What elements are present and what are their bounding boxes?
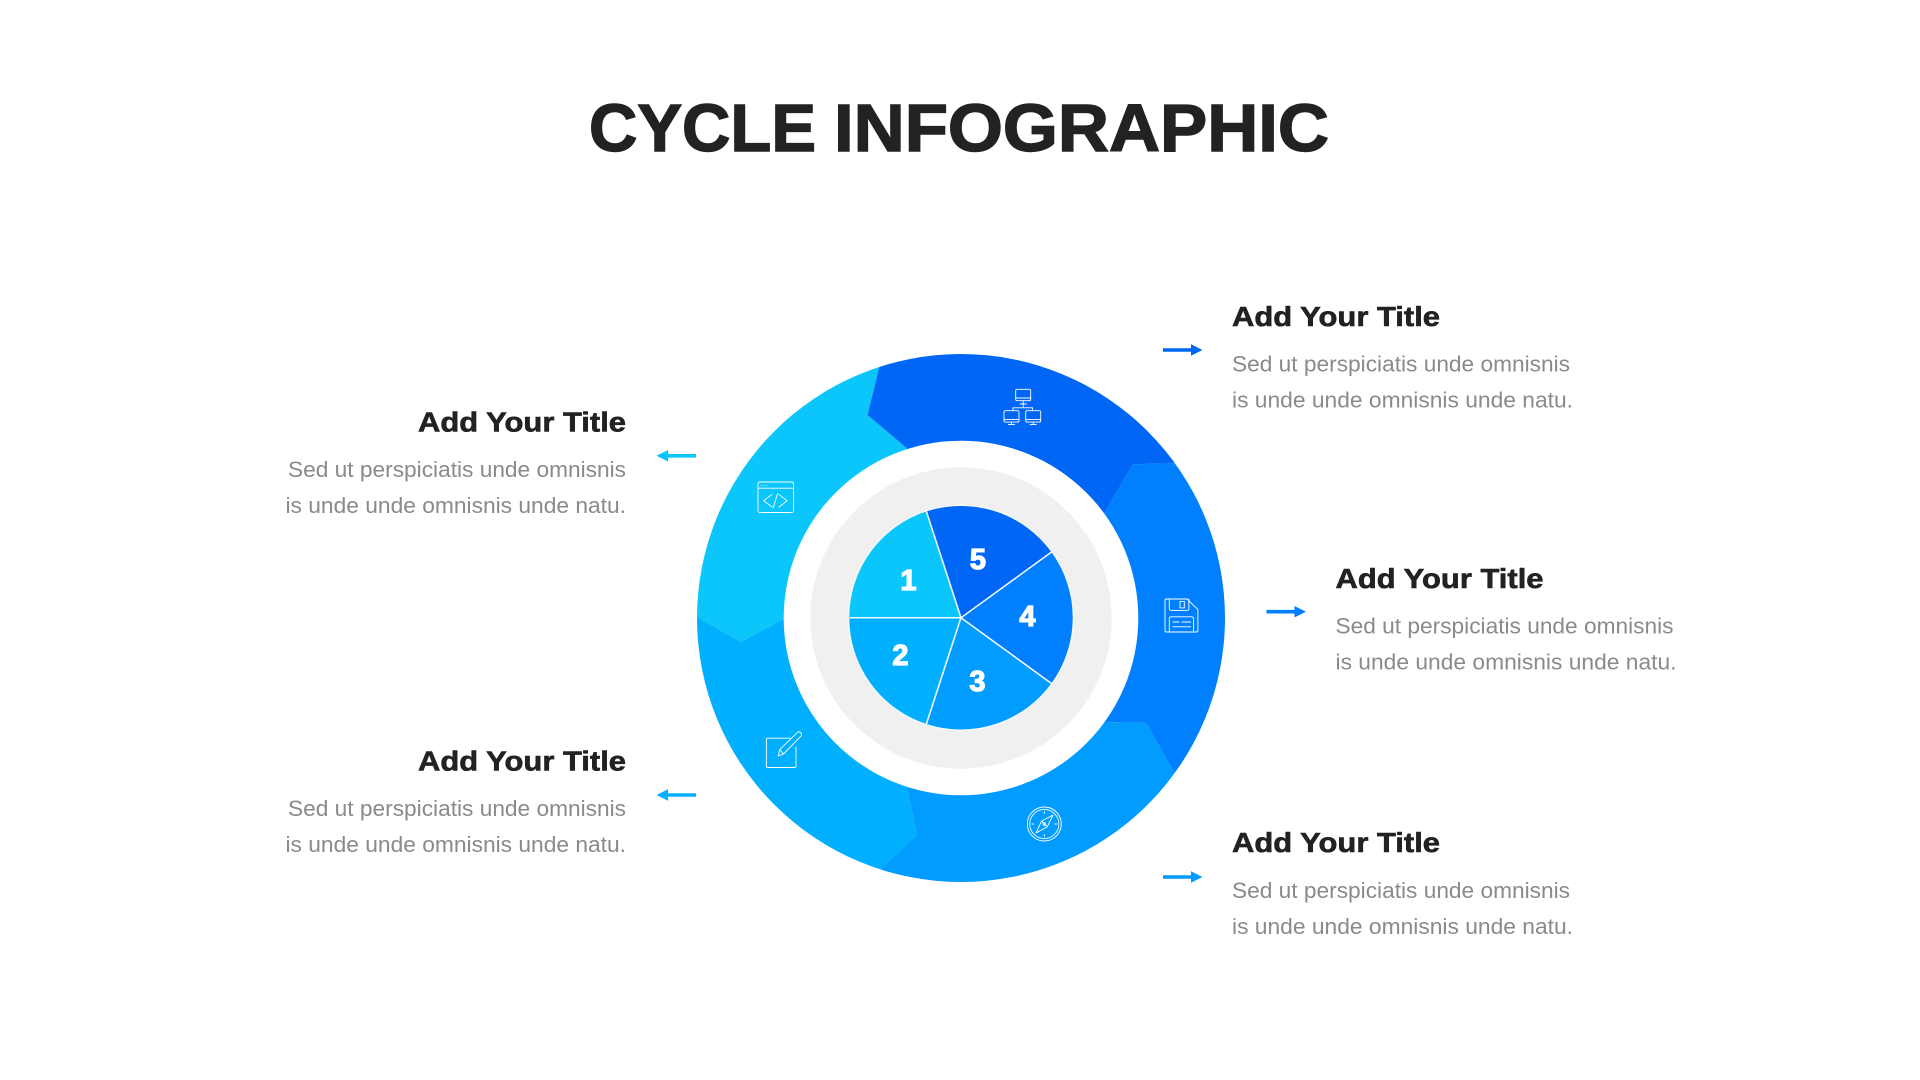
- pie slice 5: [926, 505, 1052, 618]
- text block: middle right: [1336, 563, 1676, 674]
- segment 1: [697, 367, 907, 642]
- icon: floppy disk: [1165, 599, 1198, 632]
- icon: pencil note: [766, 732, 802, 768]
- text block: bottom right: [1232, 827, 1573, 939]
- segment 2: [697, 617, 917, 870]
- body line 2: is unde unde omnisnis unde natu.: [1232, 388, 1573, 412]
- pie slice 4: [961, 552, 1073, 684]
- text block: top right: [1232, 301, 1573, 412]
- icon: network: [1004, 389, 1041, 425]
- heading: Add Your Title: [1336, 563, 1544, 594]
- body line 1: Sed ut perspiciatis unde omnisnis: [288, 796, 626, 821]
- text block: bottom left: [286, 746, 626, 857]
- body line 2: is unde unde omnisnis unde natu.: [1336, 650, 1676, 674]
- heading: Add Your Title: [1232, 827, 1440, 858]
- body line 1: Sed ut perspiciatis unde omnisnis: [1232, 352, 1570, 376]
- heading: Add Your Title: [418, 746, 626, 776]
- cycle diagram: [697, 354, 1225, 882]
- outer ring segments: [697, 354, 1225, 882]
- title: [589, 91, 1329, 166]
- text block: top left: [286, 406, 626, 518]
- number 1: 1: [900, 565, 917, 597]
- arrow: top left: [656, 450, 696, 462]
- title: INFOGRAPHIC: [834, 91, 1329, 166]
- segment 3: [880, 722, 1174, 882]
- grey ring: [810, 467, 1112, 769]
- number 5: 5: [970, 544, 986, 576]
- heading: Add Your Title: [418, 406, 626, 438]
- number 2: 2: [892, 640, 909, 672]
- pie slice 2: [848, 618, 961, 725]
- body line 2: is unde unde omnisnis unde natu.: [1232, 914, 1573, 939]
- arrow: bottom left: [656, 789, 696, 801]
- centre pie chart: [848, 505, 1073, 730]
- arrow: bottom right: [1163, 871, 1202, 883]
- arrow: top right: [1163, 344, 1202, 356]
- pie numbers: [892, 544, 1036, 698]
- arrow: middle right: [1266, 606, 1306, 617]
- pie slice 3: [926, 618, 1052, 730]
- segment 5: [868, 354, 1175, 513]
- heading: Add Your Title: [1232, 301, 1440, 332]
- body line 1: Sed ut perspiciatis unde omnisnis: [1336, 614, 1674, 638]
- segment 4: [1104, 463, 1225, 773]
- title: CYCLE: [589, 91, 816, 166]
- icon: compass: [1027, 807, 1061, 841]
- icon: code window: [758, 482, 794, 512]
- white inner disc: [784, 441, 1138, 795]
- body line 1: Sed ut perspiciatis unde omnisnis: [1232, 878, 1570, 903]
- body line 2: is unde unde omnisnis unde natu.: [286, 493, 626, 518]
- body line 1: Sed ut perspiciatis unde omnisnis: [288, 457, 626, 482]
- number 4: 4: [1019, 601, 1036, 633]
- number 3: 3: [969, 666, 986, 698]
- pie slice 1: [848, 511, 961, 618]
- body line 2: is unde unde omnisnis unde natu.: [286, 832, 626, 857]
